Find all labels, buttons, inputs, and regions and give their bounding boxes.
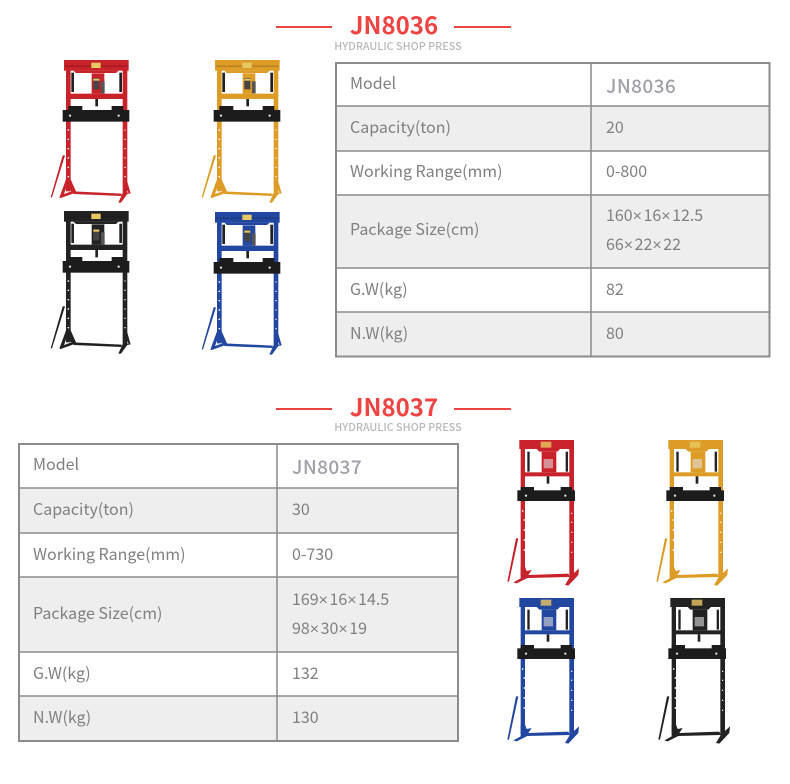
- table: JN8036 specifications: G.W(kg): [350, 276, 408, 300]
- table: JN8037 specifications: 130: [292, 704, 319, 728]
- table: JN8037 specifications: Package Size(cm): [33, 600, 162, 624]
- table: JN8037 specifications: 132: [292, 660, 319, 684]
- table: JN8036 specifications: Package Size(cm): [350, 216, 479, 240]
- table: JN8036 specifications: 80: [606, 320, 624, 344]
- table: JN8037 specifications: Capacity(ton): [33, 496, 134, 520]
- table: JN8036 specifications: N.W(kg): [350, 320, 408, 344]
- table: JN8036 specifications: 160×16×12.5: [606, 202, 703, 226]
- table: JN8037 specifications: 0-730: [292, 541, 333, 565]
- heading: JN8036: [276, 6, 511, 54]
- table: JN8037 specifications: Model: [33, 451, 79, 475]
- table: JN8037 specifications: 98×30×19: [292, 615, 367, 639]
- table: JN8037 specifications: Working Range(mm): [33, 541, 186, 565]
- table: JN8037 specifications: 30: [292, 496, 310, 520]
- table: JN8036 specifications: 20: [606, 114, 624, 138]
- table: JN8037 specifications: [19, 444, 458, 741]
- table: JN8036 specifications: Capacity(ton): [350, 114, 451, 138]
- icon: yellow press JN8037: [656, 440, 728, 586]
- icon: red press JN8037: [507, 440, 579, 586]
- table: JN8037 specifications: N.W(kg): [33, 704, 91, 728]
- icon: blue press JN8037: [507, 598, 579, 744]
- icon: black press JN8037: [658, 598, 730, 744]
- heading: JN8036: JN8036: [350, 6, 438, 41]
- table: JN8036 specifications: Working Range(mm): [350, 158, 503, 182]
- heading: JN8037: JN8037: [350, 388, 438, 423]
- table: JN8036 specifications: JN8036: [606, 72, 676, 99]
- table: JN8036 specifications: 0-800: [606, 158, 647, 182]
- table: JN8036 specifications: 66×22×22: [606, 231, 681, 255]
- icon: red press JN8036: [51, 60, 131, 203]
- heading: JN8037: [276, 388, 511, 435]
- icon: blue press JN8036: [202, 212, 282, 355]
- heading: JN8037: HYDRAULIC SHOP PRESS: [334, 419, 462, 435]
- heading: JN8036: HYDRAULIC SHOP PRESS: [334, 38, 462, 54]
- table: JN8036 specifications: [336, 63, 770, 357]
- table: JN8036 specifications: Model: [350, 70, 396, 94]
- table: JN8036 specifications: 82: [606, 276, 624, 300]
- table: JN8037 specifications: 169×16×14.5: [292, 586, 389, 610]
- table: JN8037 specifications: JN8037: [292, 453, 362, 480]
- table: JN8037 specifications: G.W(kg): [33, 660, 91, 684]
- icon: black press JN8036: [51, 211, 131, 354]
- icon: yellow press JN8036: [202, 60, 282, 203]
